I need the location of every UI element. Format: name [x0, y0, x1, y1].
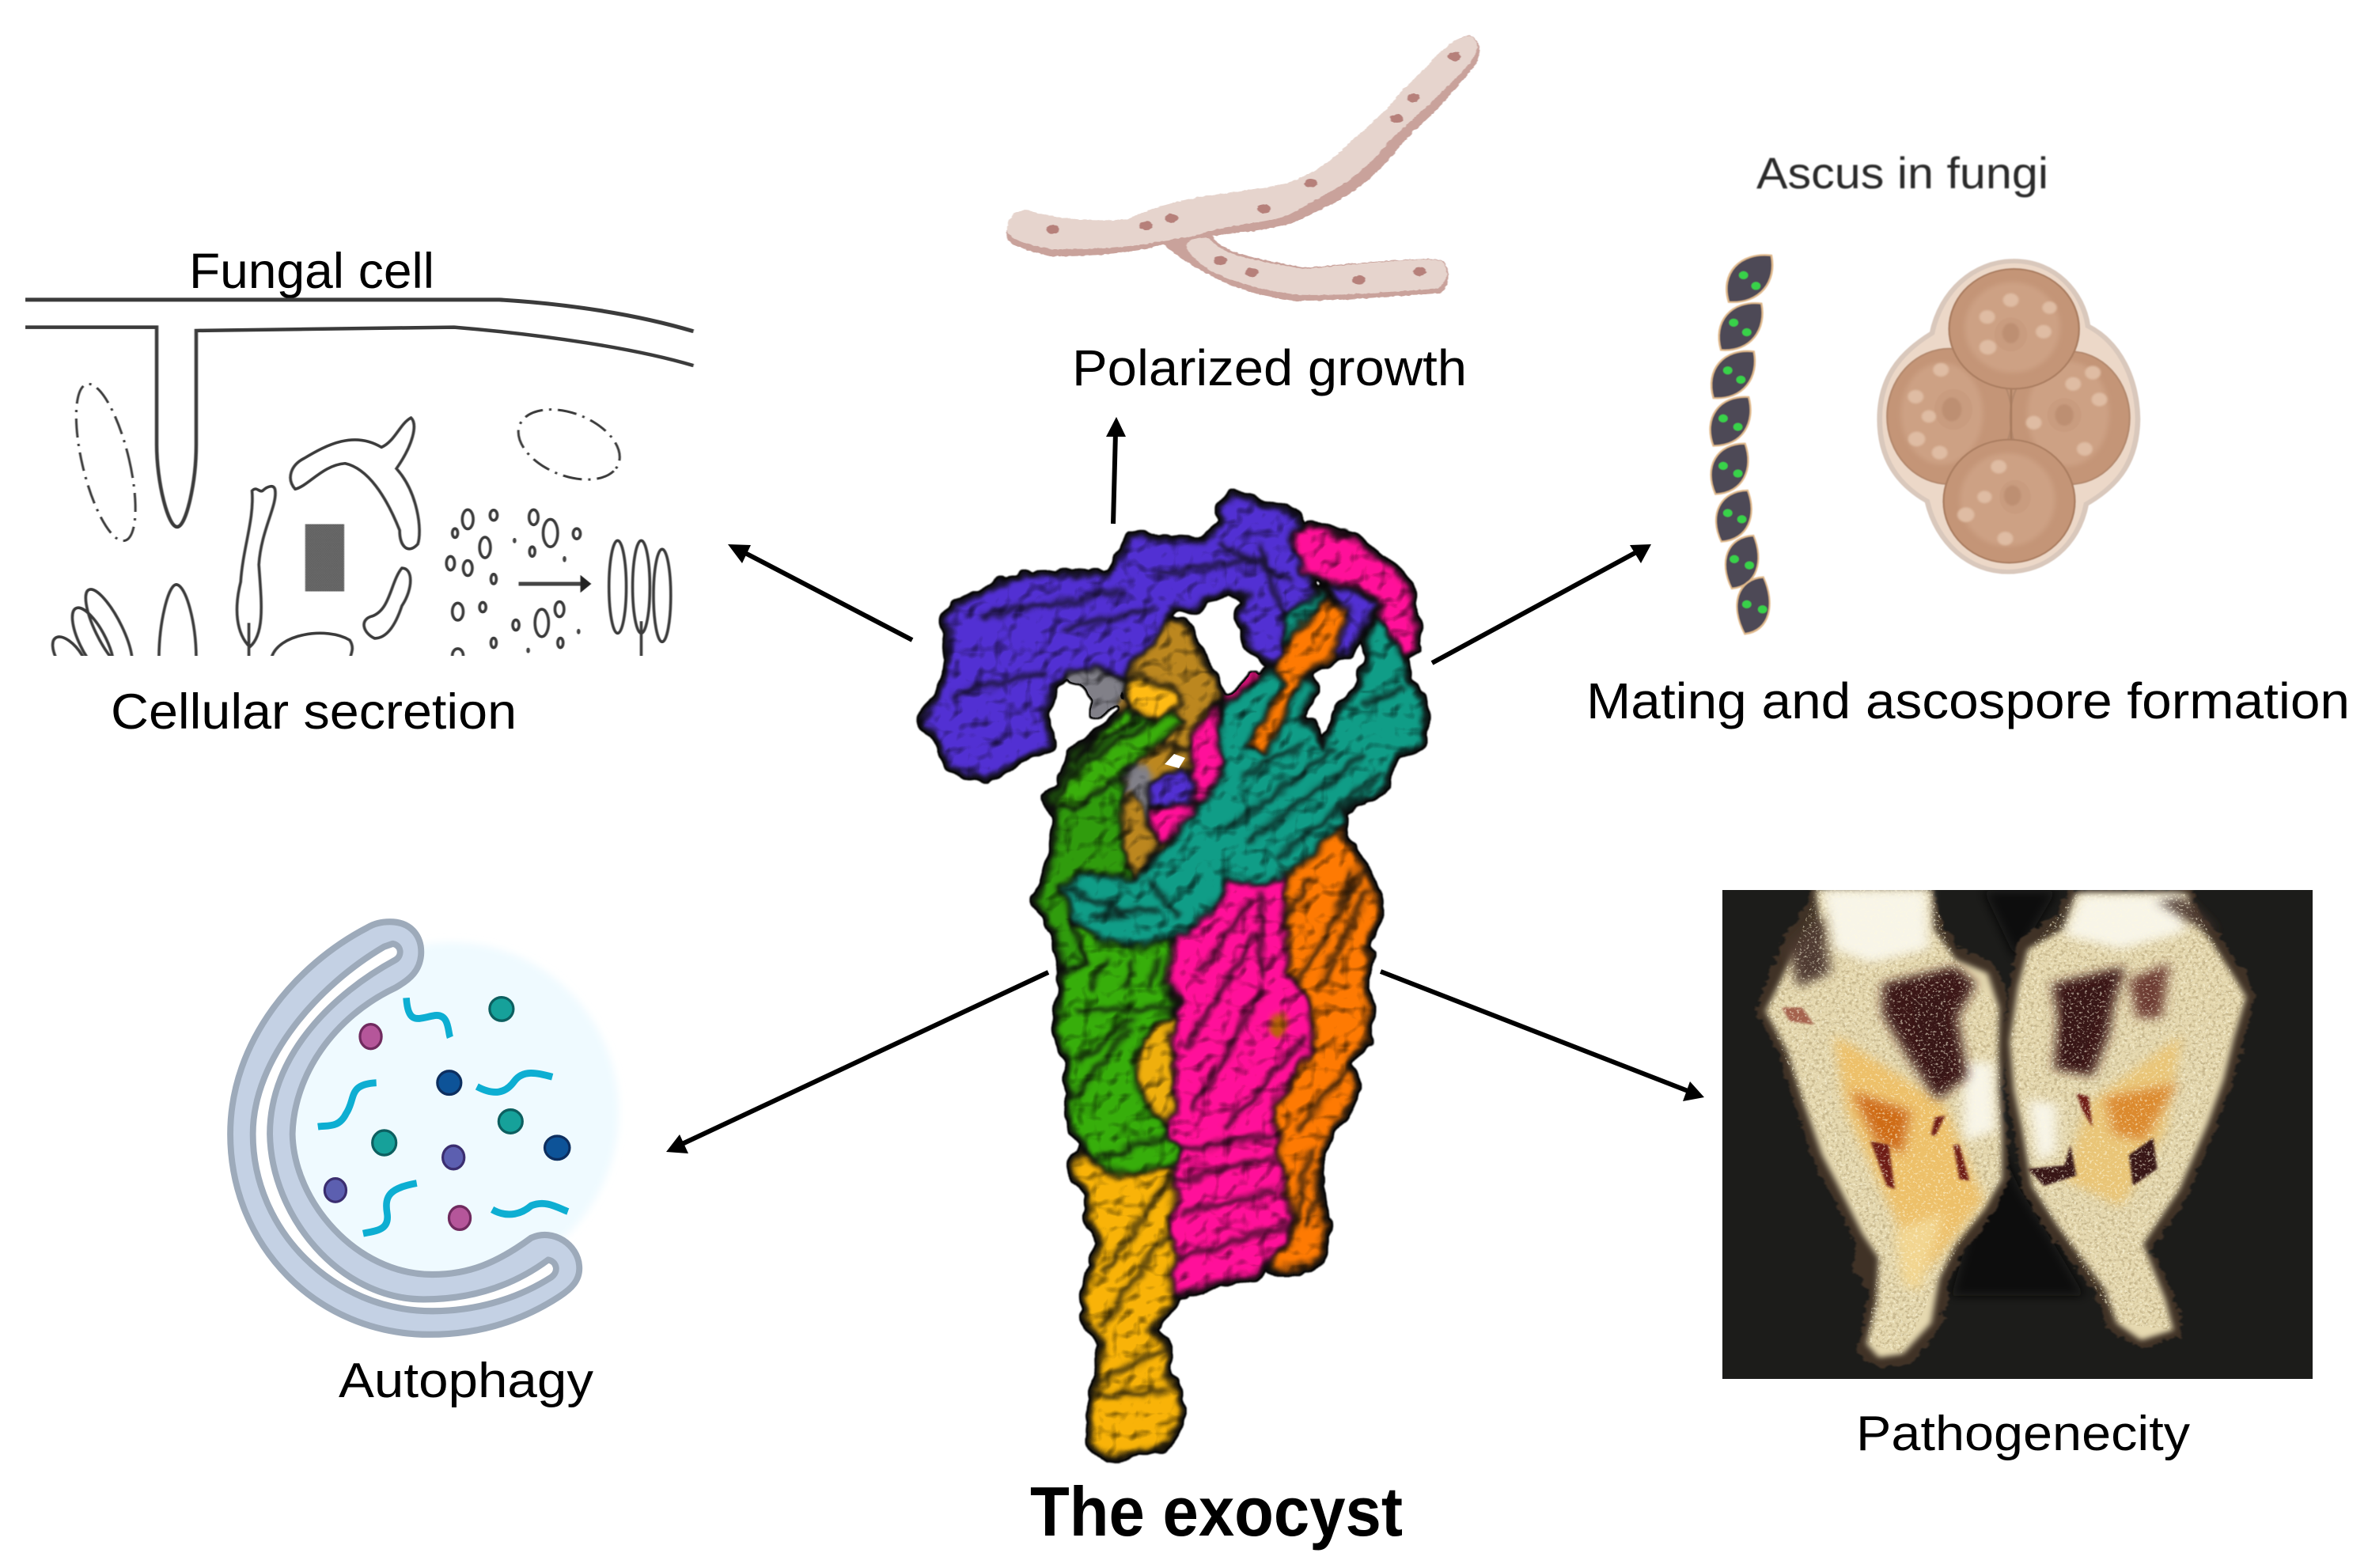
top spore: [1949, 269, 2079, 388]
centre joint: [1990, 363, 2032, 456]
purple centre: [1148, 766, 1196, 805]
icon: ascus tetrad: [1880, 261, 2138, 572]
label: Autophagy: Autophagy: [339, 1354, 593, 1408]
cargo strands: [318, 998, 568, 1233]
arrow: to polarized growth: [1106, 417, 1126, 524]
cream flesh: [1766, 890, 2246, 1358]
label: Polarized growth: Polarized growth: [1072, 339, 1467, 396]
left spore: [1887, 349, 2012, 484]
icon: branching hypha: [1006, 36, 1480, 301]
label: Pathogenecity: Pathogenecity: [1856, 1407, 2190, 1461]
magenta centre: [1191, 703, 1221, 807]
label: Cellular secretion: Cellular secretion: [111, 684, 517, 740]
icon: ascus spore chain: [1706, 255, 1779, 634]
brown inset: [1269, 1009, 1290, 1038]
diagram: fungal cell secretory system: [25, 300, 693, 685]
label: Ascus in fungi: Ascus in fungi: [1756, 148, 2048, 198]
gold lower subunit: [1070, 1153, 1183, 1460]
magenta sliver: [1224, 671, 1260, 704]
teal back strand: [1284, 584, 1330, 655]
magenta top subunit: [1291, 522, 1419, 658]
ribs: [1074, 870, 1367, 1395]
tetrad capsule: [1880, 261, 2138, 572]
purple inner loop: [1330, 581, 1377, 657]
grey subunit: [1065, 665, 1120, 718]
upper subunits: [920, 494, 1426, 972]
dark patch cores: [2027, 997, 2159, 1187]
ochre backing: [1108, 701, 1228, 884]
lower subunits: [1054, 827, 1380, 1460]
mottled shading: [1766, 890, 2246, 1354]
arrow: to cellular secretion: [728, 544, 912, 640]
arrow: to pathogenicity: [1381, 971, 1704, 1101]
right spore: [2010, 351, 2130, 484]
dark necrotic patches: [1788, 898, 2218, 1100]
green lower subunit: [1054, 915, 1184, 1175]
green upper subunit: [1035, 708, 1182, 972]
bottom spore: [1944, 440, 2074, 562]
white hole in the protein: [1165, 754, 1185, 768]
reddish streaks: [1782, 1007, 2093, 1189]
glistening specks: [1766, 890, 2246, 1354]
cargo dots: [324, 998, 570, 1229]
panel: mating and ascospore formation: [1586, 148, 2350, 729]
darker centre of background: [1951, 891, 2085, 1296]
panel: autophagy: [230, 922, 619, 1408]
dark backing: [1158, 878, 1316, 1278]
green front helix: [1049, 708, 1184, 809]
panel: cellular secretion: [25, 244, 693, 740]
tissue lobes: [1756, 890, 2256, 1369]
photo: infected tissue cross section: [1722, 890, 2313, 1379]
ribs: [956, 545, 1404, 916]
title: The exocyst: The exocyst: [1030, 1472, 1403, 1551]
ochre subunit: [1122, 618, 1222, 750]
magenta lower subunit: [1165, 874, 1313, 1296]
double membrane: [230, 922, 579, 1335]
white upper tissue: [1822, 890, 2185, 1162]
icon: autophagosome: [230, 922, 619, 1335]
arrow: to autophagy: [666, 972, 1048, 1153]
cytoplasm halo: [286, 942, 619, 1282]
orange lower subunit: [1249, 827, 1380, 1270]
panel: pathogenicity: [1722, 890, 2313, 1461]
purple main subunit: [920, 494, 1314, 780]
teal main subunit: [1060, 616, 1426, 948]
exocyst protein structure: [920, 494, 1426, 1460]
orange strip: [1247, 598, 1350, 756]
gold tip: [1123, 674, 1182, 722]
yellow and orange core: [1834, 1035, 2181, 1292]
arrow: to mating and ascospore formation: [1432, 544, 1651, 663]
label: Mating and ascospore formation: Mating and ascospore formation: [1586, 672, 2350, 729]
panel: polarized growth: [1006, 36, 1480, 396]
label: Fungal cell: Fungal cell: [189, 244, 434, 299]
gold mid subunit: [1131, 1012, 1183, 1141]
joint line: [2009, 388, 2014, 442]
